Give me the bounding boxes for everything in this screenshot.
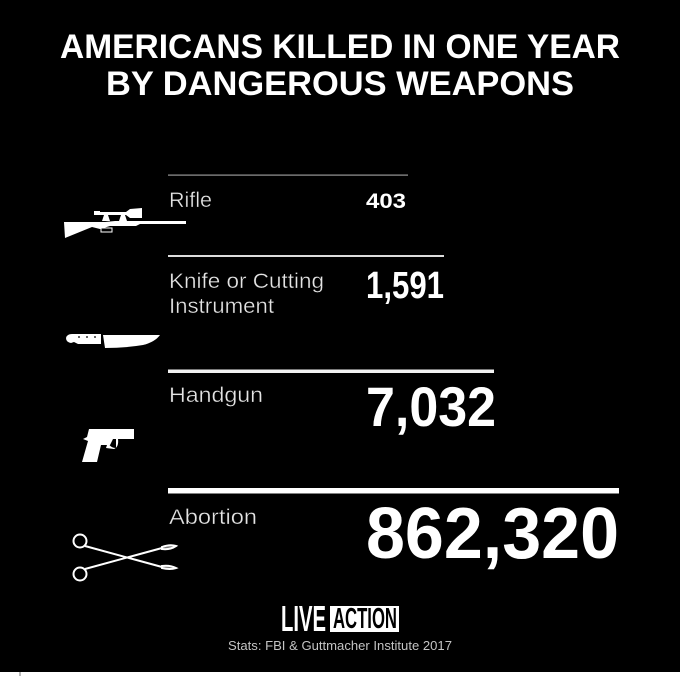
source note: Stats: FBI & Guttmacher Institute 2017 [228,638,452,653]
icon: knife [66,334,160,348]
value: 403: 403 [366,190,406,213]
label: rifle: Rifle [169,189,212,212]
logo word: live: LIVE [281,598,326,639]
label: knife or cutting instrument [169,270,324,318]
icon: rifle [64,208,186,238]
logo: Live Action [281,598,399,639]
label: handgun: Handgun [169,384,263,407]
value: 862,320: 862,320 [366,494,619,574]
title [60,28,620,103]
row: handgun [82,370,496,462]
label: abortion: Abortion [169,506,257,529]
title: AMERICANS KILLED IN ONE YEAR [60,28,620,66]
row: knife [66,255,444,348]
label: knife or cutting instrument: Knife or Cutting [169,270,324,293]
row: abortion [74,488,619,580]
value: 1,591: 1,591 [366,265,444,307]
icon: handgun [82,429,134,462]
logo box: action: ACTION [333,603,397,635]
row: rifle [64,174,408,238]
label: knife or cutting instrument: Instrument [169,295,274,318]
icon: forceps [74,534,176,580]
value: 7,032: 7,032 [366,375,496,438]
title: BY DANGEROUS WEAPONS [106,65,574,103]
